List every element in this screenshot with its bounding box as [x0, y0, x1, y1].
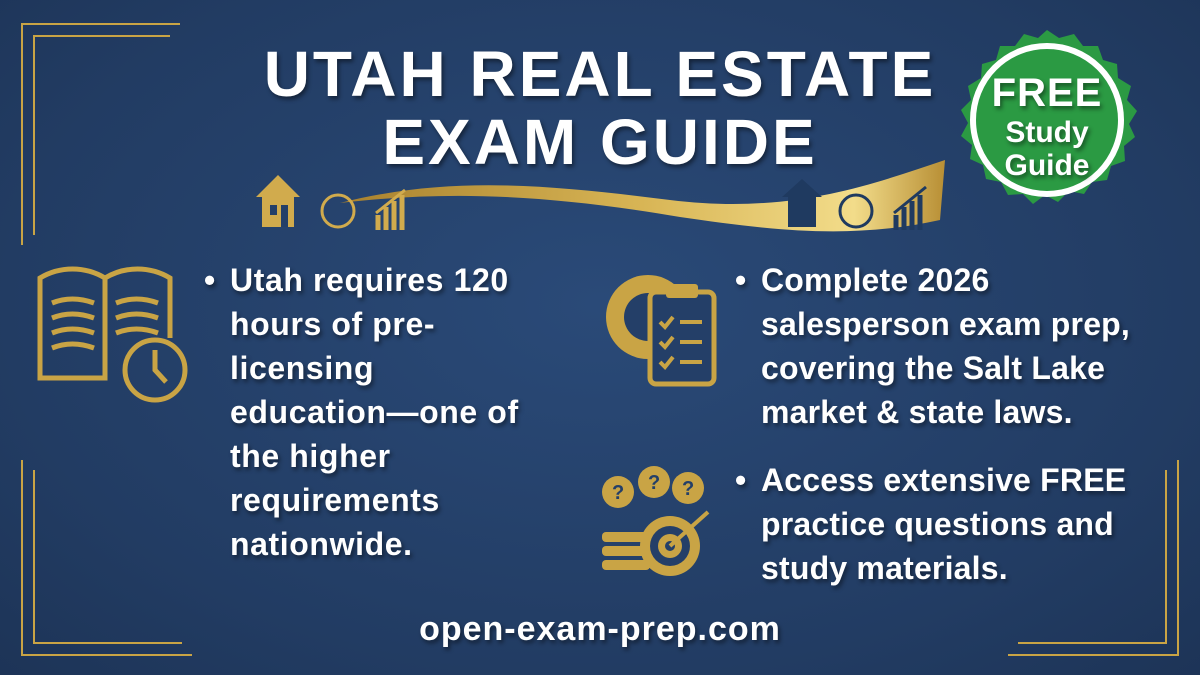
text: left bullet: hours of pre- — [230, 306, 435, 342]
icon: target with question bubbles: ? — [682, 478, 694, 500]
text: right bullet 2: • — [735, 462, 746, 498]
badge: free study guide: FREE — [992, 71, 1102, 115]
text: left bullet: licensing — [230, 350, 374, 386]
text: right bullet 2 — [735, 462, 1128, 590]
text: right bullet 1: Complete 2026 — [761, 262, 989, 298]
text: right bullet 1: salesperson exam prep, — [761, 306, 1130, 342]
text: left bullet: nationwide. — [230, 526, 413, 562]
text: right bullet 2: Access extensive FREE — [761, 462, 1126, 498]
icon: gear with clipboard — [606, 275, 716, 386]
title: EXAM GUIDE — [382, 106, 818, 178]
text: right bullet 1: covering the Salt Lake — [761, 350, 1105, 386]
footer url: open-exam-prep.com — [419, 610, 781, 648]
text: left bullet: • — [204, 262, 216, 298]
title: UTAH REAL ESTATE — [264, 38, 936, 110]
icon: target with question bubbles: ? — [648, 472, 660, 494]
text: right bullet 2: study materials. — [761, 550, 1008, 586]
text: left bullet: Utah requires 120 — [230, 262, 509, 298]
text: left bullet: the higher — [230, 438, 391, 474]
text: right bullet 1: • — [735, 262, 746, 298]
text: right bullet 1: market & state laws. — [761, 394, 1073, 430]
text: left bullet: education—one of — [230, 394, 519, 430]
badge: free study guide: Guide — [1004, 149, 1090, 182]
icon: target with question bubbles: ? — [612, 482, 624, 504]
title — [264, 38, 936, 178]
icon: book with clock — [38, 266, 188, 402]
text: right bullet 1 — [735, 262, 1132, 430]
text: right bullet 2: practice questions and — [761, 506, 1114, 542]
gold swoosh with icons — [256, 160, 945, 232]
badge: free study guide — [961, 30, 1137, 204]
icon: target with question bubbles — [602, 466, 710, 576]
text: left bullet — [204, 262, 522, 562]
badge: free study guide: Study — [1005, 116, 1089, 149]
text: left bullet: requirements — [230, 482, 440, 518]
